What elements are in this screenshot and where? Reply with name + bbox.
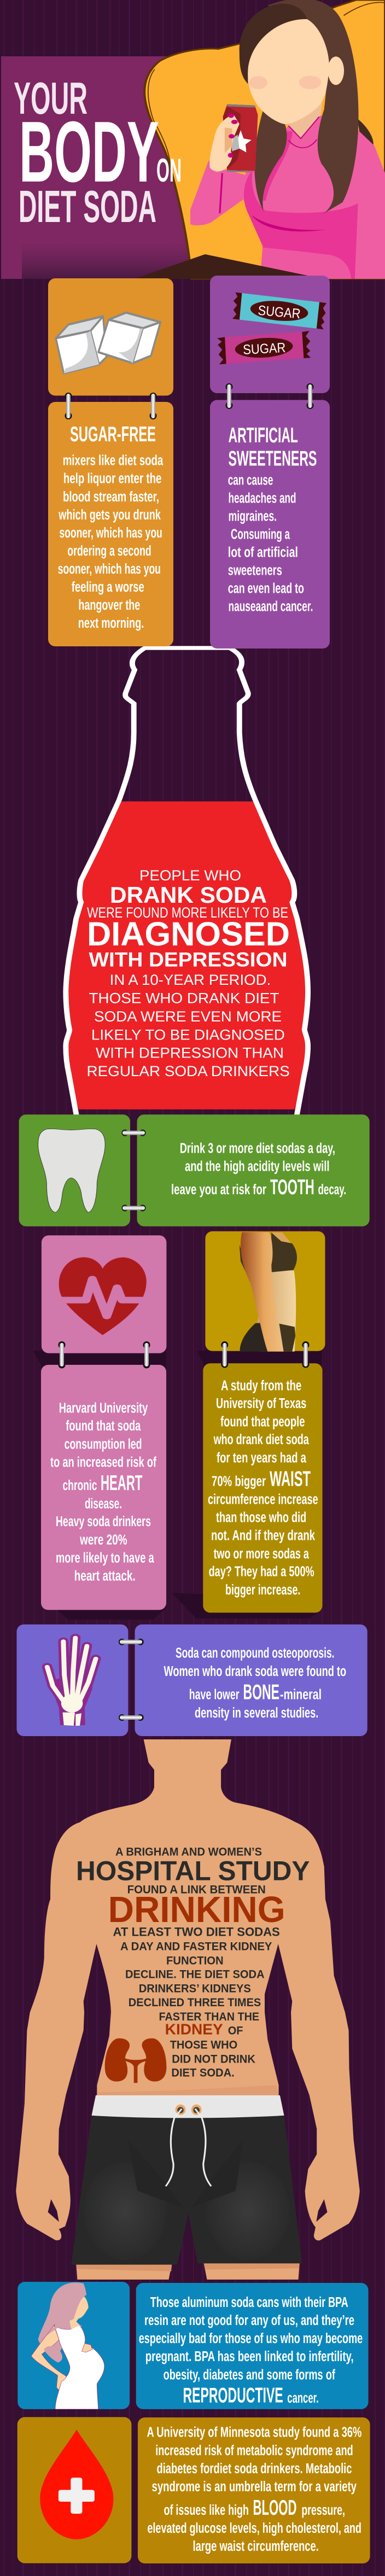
body text: blood stream faster, <box>63 489 159 505</box>
body text: lot of artificial <box>228 545 298 560</box>
bottle text: THOSE WHO DRANK DIET <box>89 990 279 1007</box>
card shadow <box>172 1351 322 1619</box>
body text: found that soda <box>66 1418 141 1434</box>
neck <box>289 102 322 138</box>
body text: which gets you drunk <box>59 507 161 523</box>
bottle text: DIAGNOSED <box>87 915 290 953</box>
image: pregnant woman <box>31 2282 104 2409</box>
body text: sooner, which has you <box>58 562 161 577</box>
body text: HOSPITAL STUDY <box>76 1855 310 1886</box>
waist image card <box>205 1231 325 1351</box>
ring <box>150 393 156 419</box>
icon: teal sugar packet: SUGAR <box>258 303 301 322</box>
body text: large waist circumference. <box>192 2539 319 2554</box>
panel: bones <box>16 1625 368 1736</box>
ring <box>119 1714 144 1721</box>
body text: Heavy soda drinkers <box>56 1514 151 1529</box>
body text: pressure, <box>301 2503 345 2518</box>
body text <box>164 1646 346 1721</box>
body text: bigger increase. <box>225 1582 300 1598</box>
body text <box>76 1845 310 2080</box>
body text: can cause <box>228 472 273 488</box>
body text: DIET SODA. <box>171 2067 235 2080</box>
body figure with kidney study <box>16 1739 360 2280</box>
body text: REPRODUCTIVE <box>183 2384 283 2407</box>
body text: were 20% <box>79 1532 127 1547</box>
body text: THOSE WHO <box>170 2039 237 2052</box>
text card <box>41 1365 166 1610</box>
body text: KIDNEY <box>165 2021 223 2038</box>
text card <box>137 1114 370 1226</box>
bottle text: WERE FOUND MORE LIKELY TO BE <box>87 904 288 921</box>
bottle text: IN A 10-YEAR PERIOD. <box>110 972 271 988</box>
body text: to an increased risk of <box>50 1455 156 1470</box>
body text: and the high acidity levels will <box>185 1159 329 1175</box>
icon: tooth <box>38 1129 105 1212</box>
heading <box>229 424 317 471</box>
icon: sugar cubes <box>56 313 160 373</box>
bottle text: WITH DEPRESSION THAN <box>96 1045 284 1061</box>
ring <box>65 393 72 419</box>
bottle text: PEOPLE WHO <box>139 867 241 884</box>
icon card <box>16 1625 128 1736</box>
body text <box>228 472 313 615</box>
body text: OF <box>228 2025 243 2037</box>
text card <box>136 2283 368 2409</box>
face <box>248 19 329 124</box>
body text: not. And if they drank <box>211 1528 316 1544</box>
body text: feeling a worse <box>72 580 144 595</box>
body text: hangover the <box>78 598 140 613</box>
body text: FOUND A LINK BETWEEN <box>127 1883 266 1896</box>
body text: decay. <box>318 1182 346 1198</box>
icon: teal sugar packet <box>232 293 326 329</box>
shorts <box>71 2116 302 2265</box>
body text: FUNCTION <box>166 1954 224 1967</box>
dress <box>243 115 385 279</box>
body text: mixers like diet soda <box>63 453 164 469</box>
body text: leave you at risk for <box>171 1182 266 1198</box>
body text: day? They had a 500% <box>209 1564 314 1580</box>
waist shadow <box>97 2085 279 2096</box>
torso and arms <box>16 1739 360 2240</box>
bottle text: SODA WERE EVEN MORE <box>94 1008 282 1025</box>
body text: help liquor enter the <box>63 471 161 487</box>
title text: BODY <box>19 104 159 200</box>
body text: migraines. <box>229 509 277 524</box>
body text: cancer. <box>287 2391 319 2406</box>
body text: DECLINE. THE DIET SODA <box>125 1968 265 1981</box>
body text: BONE <box>243 1681 279 1704</box>
body text <box>50 1400 156 1584</box>
ring <box>121 1205 145 1211</box>
body text: for ten years had a <box>217 1450 306 1465</box>
icon: heart with pulse <box>58 1257 147 1335</box>
bottle text: LIKELY TO BE DIAGNOSED <box>91 1026 285 1043</box>
soda can <box>223 104 258 171</box>
heading: SUGAR-FREE <box>70 423 156 446</box>
bottle text: DRANK SODA <box>110 882 267 908</box>
body text <box>147 2425 361 2554</box>
ring <box>302 1341 310 1368</box>
text card <box>135 1625 368 1736</box>
ring <box>58 1341 66 1368</box>
heading: ARTIFICIAL <box>229 424 298 447</box>
body text: FASTER THAN THE <box>159 2011 259 2023</box>
body text: Harvard University <box>59 1400 148 1416</box>
body text: A DAY AND FASTER KIDNEY <box>120 1941 272 1953</box>
body text: AT LEAST TWO DIET SODAS <box>113 1925 280 1939</box>
body text: heart attack. <box>74 1569 136 1584</box>
body text: University of Texas <box>216 1396 306 1411</box>
ring <box>143 1341 150 1368</box>
body text: chronic <box>62 1478 97 1493</box>
panel: artificial sweeteners <box>210 276 330 649</box>
body text: have lower <box>189 1687 240 1703</box>
bottle text <box>86 867 290 1079</box>
body text: sweeteners <box>228 563 282 579</box>
body text: BLOOD <box>253 2496 296 2520</box>
card shadow <box>33 1351 166 1620</box>
icon: hand skeleton <box>47 1638 96 1726</box>
body text: DID NOT DRINK <box>172 2053 255 2065</box>
body text: of issues like high <box>164 2503 249 2518</box>
legs <box>76 2264 172 2280</box>
back hair <box>357 119 374 159</box>
ring <box>306 383 314 409</box>
panel: tooth decay <box>19 1114 370 1226</box>
body text: more likely to have a <box>56 1550 154 1566</box>
body text: A study from the <box>221 1378 301 1394</box>
panel: reproductive <box>18 2282 369 2409</box>
title text: ON <box>156 152 182 189</box>
body text: HEART <box>101 1471 142 1495</box>
heart icon card <box>42 1235 166 1353</box>
icon: pink sugar packet <box>217 331 311 364</box>
soda liquid <box>66 802 308 1109</box>
body text: A BRIGHAM AND WOMEN’S <box>115 1845 262 1858</box>
text card <box>48 402 173 646</box>
waistband <box>91 2095 284 2118</box>
body text: nauseaand cancer. <box>229 599 313 615</box>
body text <box>171 1141 346 1199</box>
title text: DIET SODA <box>19 181 156 232</box>
body text: next morning. <box>78 616 144 631</box>
image card <box>18 2282 130 2409</box>
bottle text: WITH DEPRESSION <box>89 949 288 971</box>
icon: kidneys <box>105 2038 166 2083</box>
body text: two or more sodas a <box>214 1546 309 1562</box>
body text: who drank diet soda <box>213 1432 309 1447</box>
icon: pink sugar packet: SUGAR <box>243 340 286 358</box>
body text: sooner, which has you <box>59 525 162 541</box>
header: title and woman drinking soda <box>1 0 385 279</box>
body text: circumference increase <box>208 1492 318 1507</box>
hand <box>209 114 240 171</box>
body text: can even lead to <box>228 581 304 597</box>
title panel <box>1 56 385 279</box>
candy card <box>210 276 330 393</box>
body text: DECLINED THREE TIMES <box>129 1996 261 2009</box>
image: waist figure <box>240 1232 297 1352</box>
bottle outline <box>66 648 308 1117</box>
panel: waist <box>172 1231 325 1619</box>
body text: DRINKING <box>108 1889 285 1930</box>
ring <box>121 1130 145 1136</box>
ring <box>221 1341 228 1368</box>
body text: -mineral <box>280 1687 322 1703</box>
body text: than those who did <box>216 1510 306 1525</box>
body text: WAIST <box>270 1467 311 1491</box>
text card <box>203 1363 323 1613</box>
body text: found that people <box>220 1414 305 1429</box>
body text: consumption led <box>65 1436 142 1452</box>
body text: disease. <box>85 1496 122 1511</box>
body text: Consuming a <box>231 527 290 542</box>
hair <box>267 0 359 215</box>
title text <box>14 73 182 232</box>
armchair <box>144 0 385 279</box>
text card <box>138 2417 370 2563</box>
text card <box>210 400 330 649</box>
panel: blood <box>18 2417 370 2563</box>
icon card <box>18 2417 131 2563</box>
icon card <box>19 1114 130 1226</box>
body text: 70% bigger <box>212 1474 266 1489</box>
title text: YOUR <box>14 73 88 124</box>
body text: headaches and <box>229 490 296 506</box>
bottle with depression statistic <box>66 648 308 1117</box>
icon: blood drop with cross <box>40 2429 113 2539</box>
heading: SWEETENERS <box>229 447 317 471</box>
drawstrings <box>166 2105 211 2186</box>
ring <box>119 1639 144 1645</box>
panel: heart <box>33 1235 166 1620</box>
body text: TOOTH <box>270 1176 314 1199</box>
body text <box>58 453 164 631</box>
body text: DRINKERS’ KIDNEYS <box>139 1982 251 1995</box>
body text: ordering a second <box>67 544 151 559</box>
panel: sugar-free <box>48 278 173 646</box>
sugar cubes card <box>48 278 173 396</box>
illustration: woman on armchair <box>134 0 385 279</box>
ring <box>225 383 233 409</box>
body text <box>208 1378 318 1598</box>
table <box>134 254 323 279</box>
bottle text: REGULAR SODA DRINKERS <box>86 1063 290 1079</box>
body text: density in several studies. <box>195 1705 318 1721</box>
body text <box>139 2295 363 2407</box>
